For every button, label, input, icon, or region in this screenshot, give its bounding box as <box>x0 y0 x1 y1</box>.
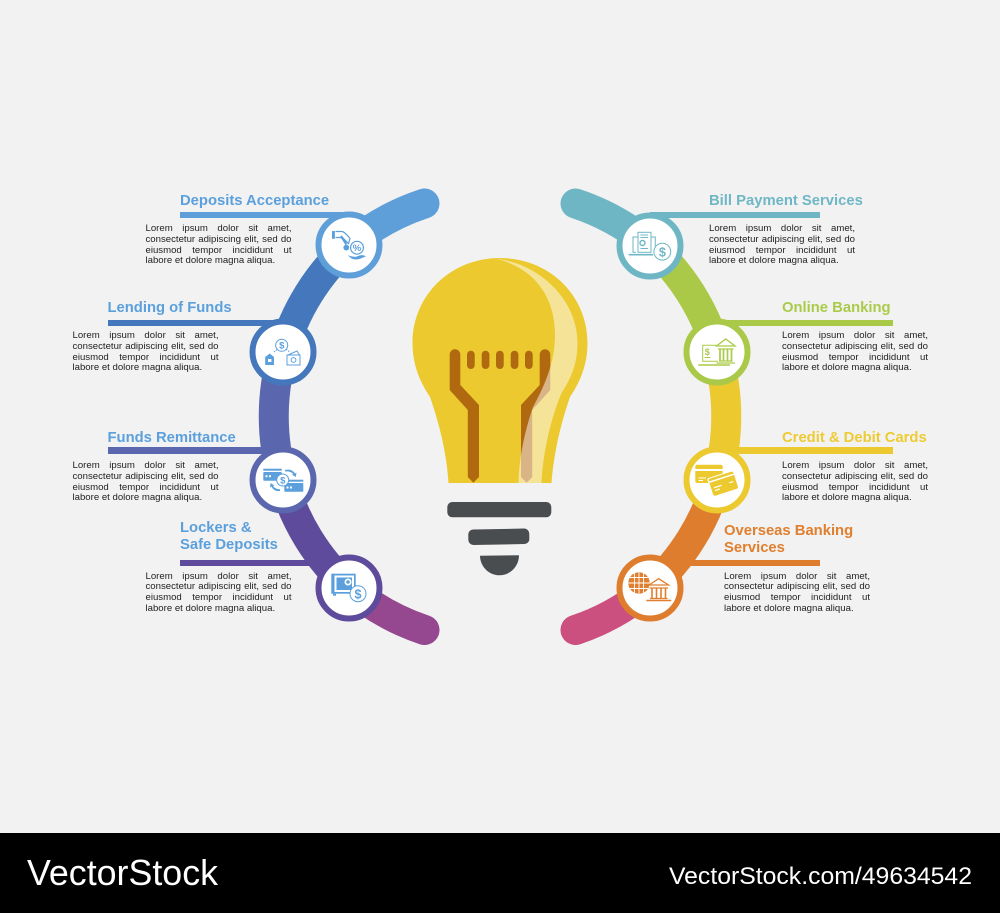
heading: Services <box>724 540 785 556</box>
description: eiusmod tempor incididunt ut <box>146 592 292 603</box>
leader bar <box>108 320 278 326</box>
description: consectetur adipiscing elit, sed do <box>146 581 292 592</box>
description <box>72 330 218 373</box>
leader bar <box>718 320 893 326</box>
description <box>146 223 292 266</box>
heading: Overseas Banking <box>724 522 853 538</box>
description: consectetur adipiscing elit, sed do <box>782 471 928 482</box>
description: eiusmod tempor incididunt ut <box>72 352 218 363</box>
description: consectetur adipiscing elit, sed do <box>72 471 218 482</box>
icon: safe with coin: $ <box>355 587 362 601</box>
description: eiusmod tempor incididunt ut <box>146 245 292 256</box>
bulb glass <box>412 258 588 483</box>
bulb base: middle bar <box>468 528 529 545</box>
icon: cards exchange with coin: $ <box>280 476 286 487</box>
description: labore et dolore magna aliqua. <box>782 492 912 503</box>
icon: hand dropping coin with percent <box>316 212 382 278</box>
heading <box>724 522 853 556</box>
panel: Online Banking <box>684 300 928 386</box>
heading: Safe Deposits <box>180 537 278 553</box>
icon: safe with coin <box>316 554 382 622</box>
description: eiusmod tempor incididunt ut <box>72 482 218 493</box>
description: labore et dolore magna aliqua. <box>146 603 275 614</box>
icon: cards exchange with coin <box>250 448 316 514</box>
description <box>709 223 855 266</box>
heading: Deposits Acceptance <box>180 192 329 208</box>
heading: Credit & Debit Cards <box>782 430 927 446</box>
description: Lorem ipsum dolor sit amet, <box>72 460 218 471</box>
panel: Bill Payment Services <box>616 192 863 280</box>
panel: Credit & Debit Cards <box>684 430 928 514</box>
icon: bill documents with coin: $ <box>659 245 666 259</box>
description <box>782 330 928 373</box>
leader bar <box>728 447 893 454</box>
panel: Overseas Banking Services <box>616 522 870 622</box>
panel: Funds Remittance <box>72 430 316 514</box>
image id: VectorStock.com/49634542 <box>669 863 972 890</box>
icon: laptop with bank: $ <box>705 347 710 357</box>
description: Lorem ipsum dolor sit amet, <box>782 330 928 341</box>
description <box>146 571 292 614</box>
description: labore et dolore magna aliqua. <box>709 255 839 266</box>
description: eiusmod tempor incididunt ut <box>709 245 855 256</box>
description: consectetur adipiscing elit, sed do <box>146 234 292 245</box>
icon: laptop with bank <box>684 318 750 386</box>
bulb highlight <box>496 259 578 483</box>
footer watermark band <box>0 833 1000 913</box>
icon: loans for house and cash: $ <box>279 341 285 352</box>
leader bar <box>180 560 315 566</box>
description: Lorem ipsum dolor sit amet, <box>146 571 292 582</box>
icon: hand dropping coin with percent: % <box>353 243 362 254</box>
heading: Online Banking <box>782 300 891 316</box>
description: Lorem ipsum dolor sit amet, <box>72 330 218 341</box>
description <box>724 571 870 614</box>
icon: bill documents with coin <box>616 212 684 280</box>
icon: loans for house and cash <box>250 318 316 386</box>
panel: Lockers & Safe Deposits <box>146 520 382 622</box>
heading: Funds Remittance <box>108 430 236 446</box>
description: consectetur adipiscing elit, sed do <box>782 341 928 352</box>
icon: credit cards <box>684 448 750 514</box>
description: labore et dolore magna aliqua. <box>72 362 202 373</box>
description: Lorem ipsum dolor sit amet, <box>146 223 292 234</box>
leader bar <box>180 212 350 218</box>
description: eiusmod tempor incididunt ut <box>782 352 928 363</box>
panel: Deposits Acceptance <box>146 192 382 278</box>
brand name: VectorStock <box>27 852 219 893</box>
description: consectetur adipiscing elit, sed do <box>709 234 855 245</box>
description: labore et dolore magna aliqua. <box>146 255 275 266</box>
description <box>782 460 928 503</box>
heading <box>180 520 278 553</box>
heading: Lending of Funds <box>108 300 232 316</box>
description: eiusmod tempor incididunt ut <box>782 482 928 493</box>
filament <box>450 349 550 483</box>
description: eiusmod tempor incididunt ut <box>724 592 870 603</box>
leader bar <box>108 447 268 454</box>
light bulb illustration <box>412 258 588 576</box>
heading: Bill Payment Services <box>709 192 863 208</box>
description: Lorem ipsum dolor sit amet, <box>724 571 870 582</box>
description: consectetur adipiscing elit, sed do <box>724 581 870 592</box>
heading: Lockers & <box>180 520 252 536</box>
panel: Lending of Funds <box>72 300 316 386</box>
icon: globe with bank <box>616 554 684 622</box>
description: Lorem ipsum dolor sit amet, <box>782 460 928 471</box>
description <box>72 460 218 503</box>
description: labore et dolore magna aliqua. <box>72 492 202 503</box>
description: consectetur adipiscing elit, sed do <box>72 341 218 352</box>
description: labore et dolore magna aliqua. <box>782 362 912 373</box>
leader bar <box>684 560 820 566</box>
description: Lorem ipsum dolor sit amet, <box>709 223 855 234</box>
bulb base: top bar <box>447 502 551 517</box>
description: labore et dolore magna aliqua. <box>724 603 854 614</box>
bulb base: tip <box>480 555 519 575</box>
leader bar <box>650 212 820 218</box>
